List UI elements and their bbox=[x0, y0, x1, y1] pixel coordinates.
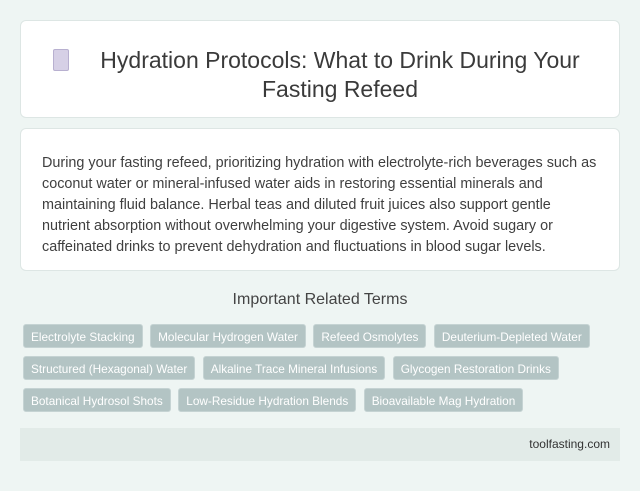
title card bbox=[20, 20, 620, 118]
title: Hydration Protocols: What to Drink During Your Fasting Refeed bbox=[100, 47, 580, 102]
footer bbox=[20, 428, 620, 461]
footer: toolfasting.com bbox=[529, 437, 610, 451]
heading: related terms: Important Related Terms bbox=[233, 291, 407, 308]
icon: document bbox=[53, 49, 69, 71]
tags: Alkaline Trace Mineral Infusions bbox=[211, 362, 377, 376]
tags: Molecular Hydrogen Water bbox=[158, 330, 298, 344]
text card: summary: During your fasting refeed, prioritizing hydration with electrolyte-rich beverages such as coconut water or mineral-infused water aids in restoring essential minerals and maintaining fluid balance. Herbal teas and diluted fruit juices also support gentle nutrient absorption without overwhelming your digestive system. Avoid sugary or caffeinated drinks to prevent dehydration and fluctuations in blood sugar levels. bbox=[42, 155, 596, 255]
tags: Low-Residue Hydration Blends bbox=[186, 394, 348, 408]
tags: Electrolyte Stacking bbox=[31, 330, 135, 344]
tags: Refeed Osmolytes bbox=[321, 330, 418, 344]
tags: Glycogen Restoration Drinks bbox=[401, 362, 551, 376]
tags: Structured (Hexagonal) Water bbox=[31, 362, 187, 376]
tags: Deuterium-Depleted Water bbox=[442, 330, 582, 344]
text card: summary bbox=[20, 128, 620, 271]
tags bbox=[23, 324, 590, 412]
tags: Botanical Hydrosol Shots bbox=[31, 394, 163, 408]
tags: Bioavailable Mag Hydration bbox=[372, 394, 515, 408]
